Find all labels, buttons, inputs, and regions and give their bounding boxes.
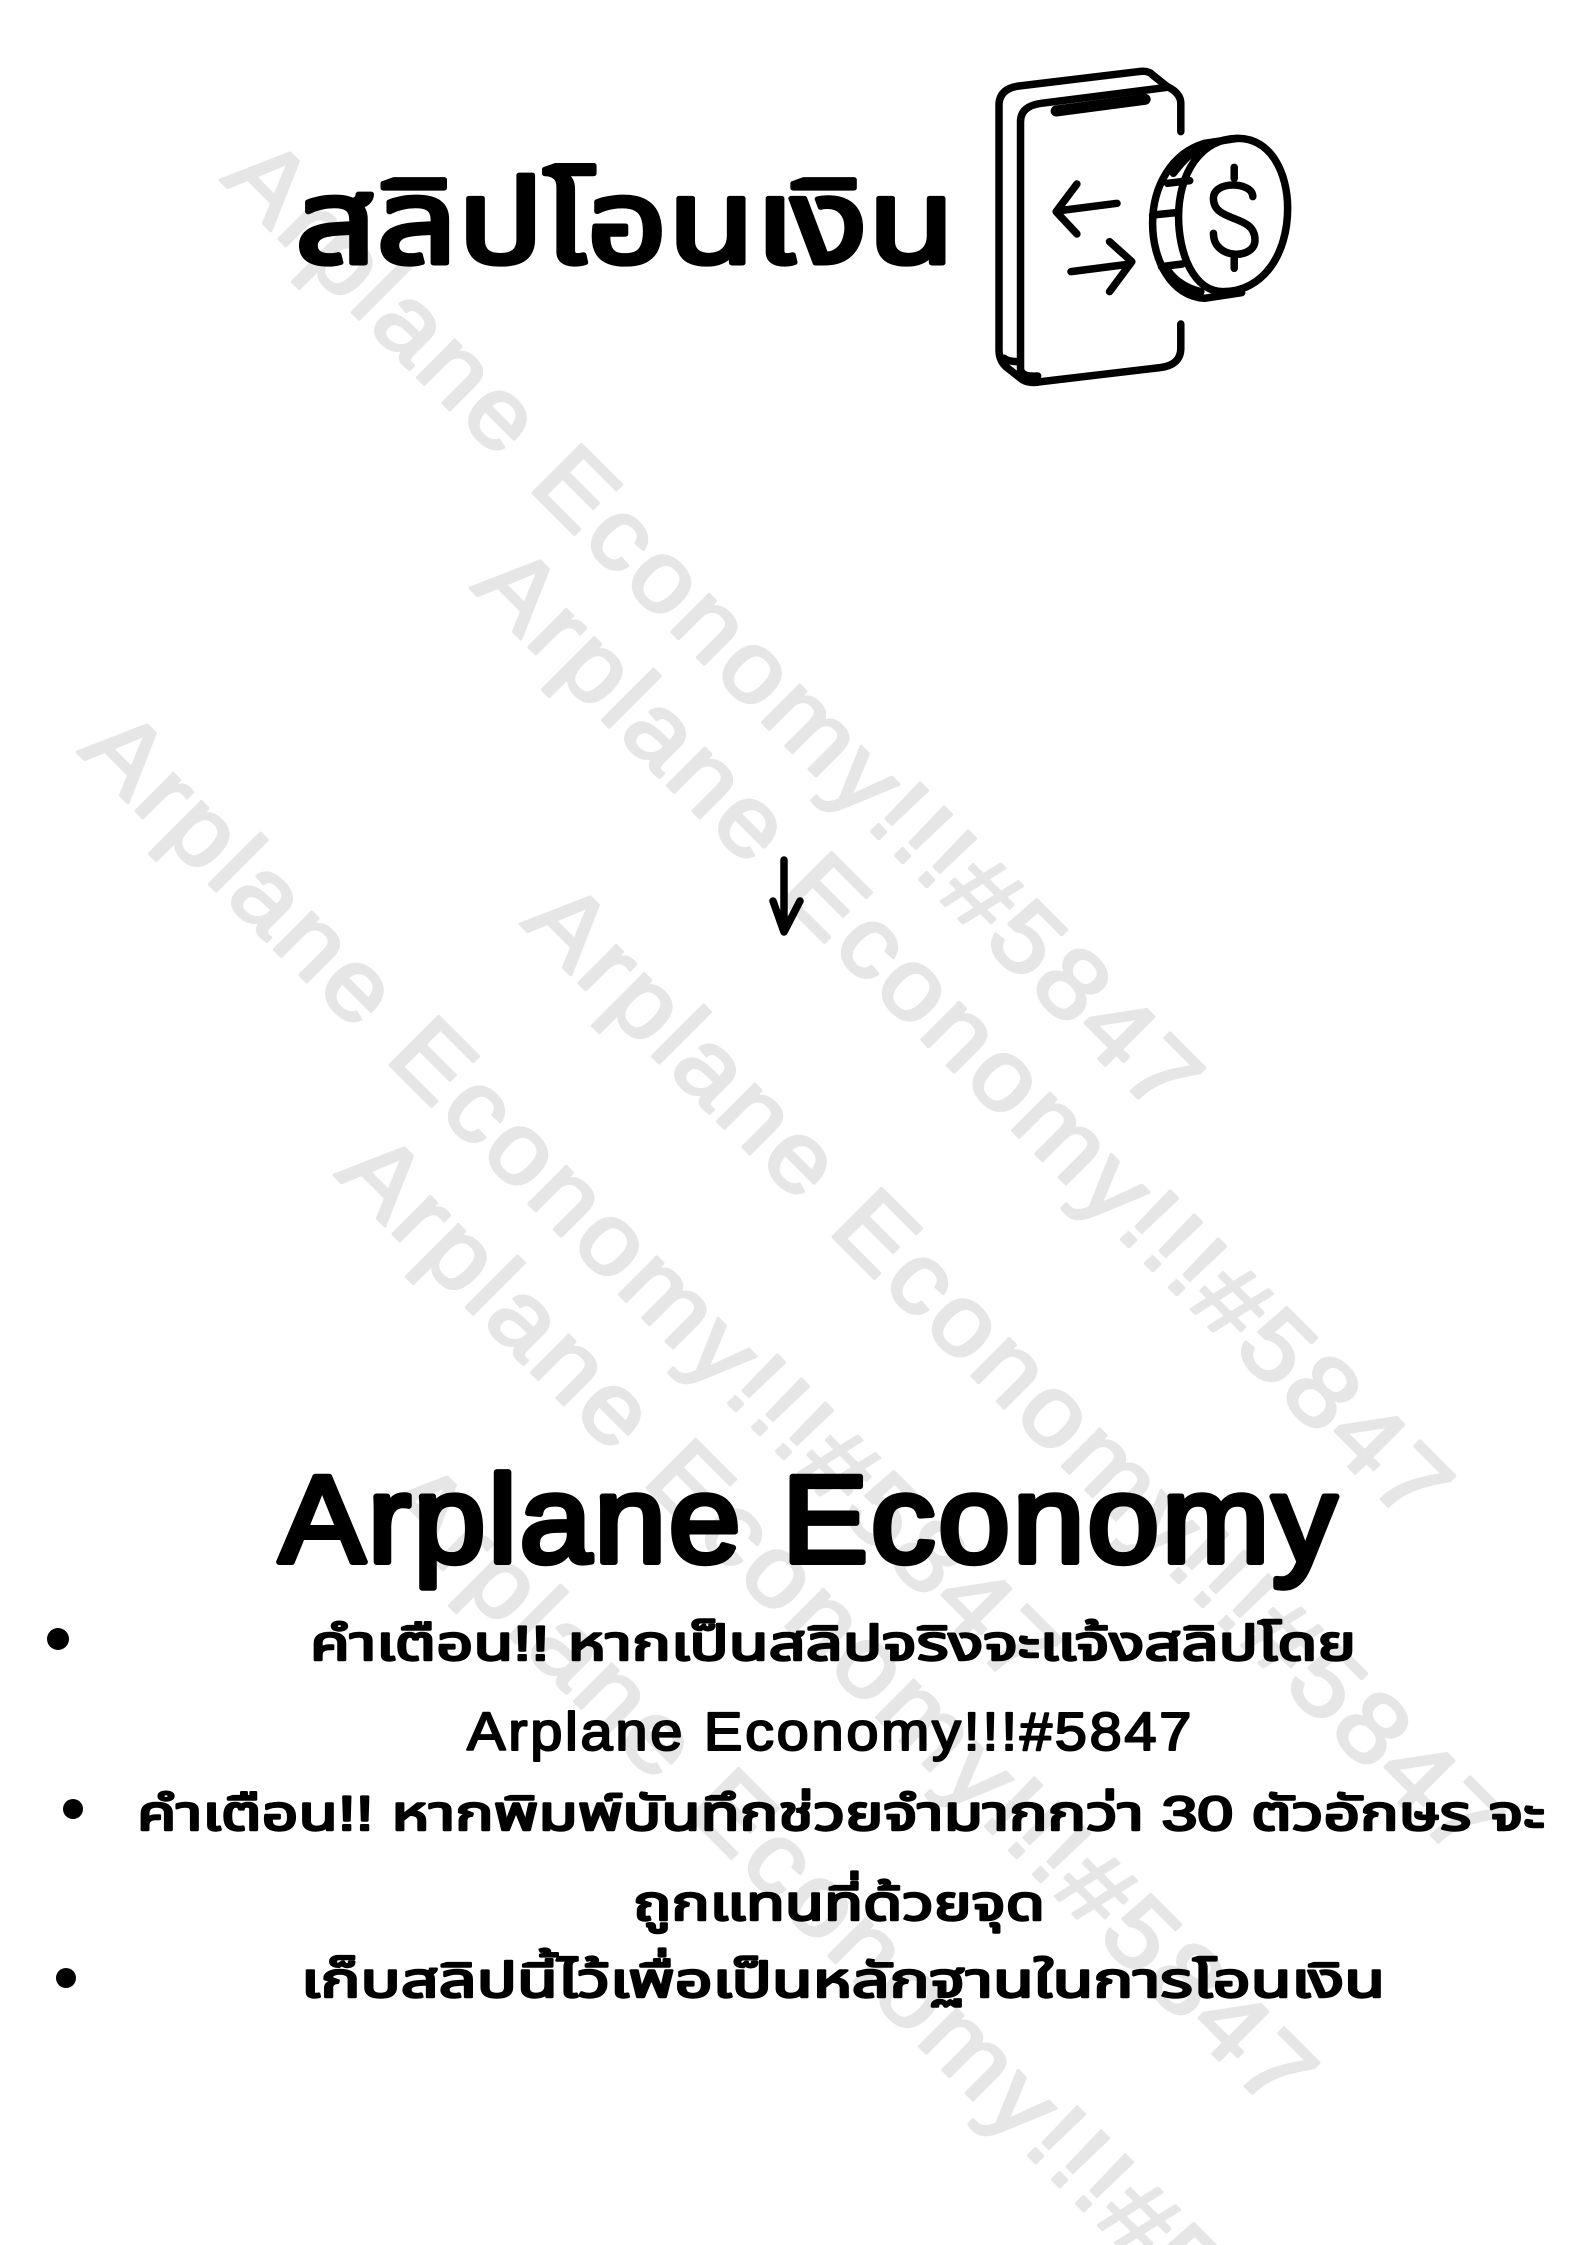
bullet 1 <box>47 1628 69 1650</box>
brand heading: Arplane Economy <box>279 1449 1337 1588</box>
watermark pattern: Arplane Economy!!!#5847 <box>318 1112 1337 2131</box>
note 2 line 2: ถูกแทนที่ด้วยจุด <box>633 1871 1045 1933</box>
notes list <box>47 1618 1545 2008</box>
bullet 3 <box>56 1968 76 1988</box>
watermark pattern: Arplane Economy!!!#5847 <box>61 689 1080 1708</box>
icon: phone with coin transfer <box>999 71 1288 382</box>
watermark pattern: Arplane Economy!!!#5847 <box>454 525 1473 1544</box>
watermark pattern: Arplane Economy!!!#5847 <box>204 117 1223 1136</box>
watermark pattern: Arplane Economy!!!#5847 <box>504 861 1523 1880</box>
arrow <box>773 860 800 932</box>
note 3: เก็บสลิปนี้ไว้เพื่อเป็นหลักฐานในการโอนเงิน <box>301 1948 1385 2008</box>
note 1 line 2: Arplane Economy!!!#5847 <box>467 1701 1191 1762</box>
note 2 line 1: คำเตือน!! หากพิมพ์บันทึกช่วยจำมากกว่า 30 ตัวอักษร จะ <box>137 1788 1545 1841</box>
bullet 2 <box>63 1799 83 1819</box>
title: สลิปโอนเงิน <box>295 157 955 289</box>
note 1 line 1: คำเตือน!! หากเป็นสลิปจริงจะแจ้งสลิปโดย <box>310 1618 1356 1671</box>
